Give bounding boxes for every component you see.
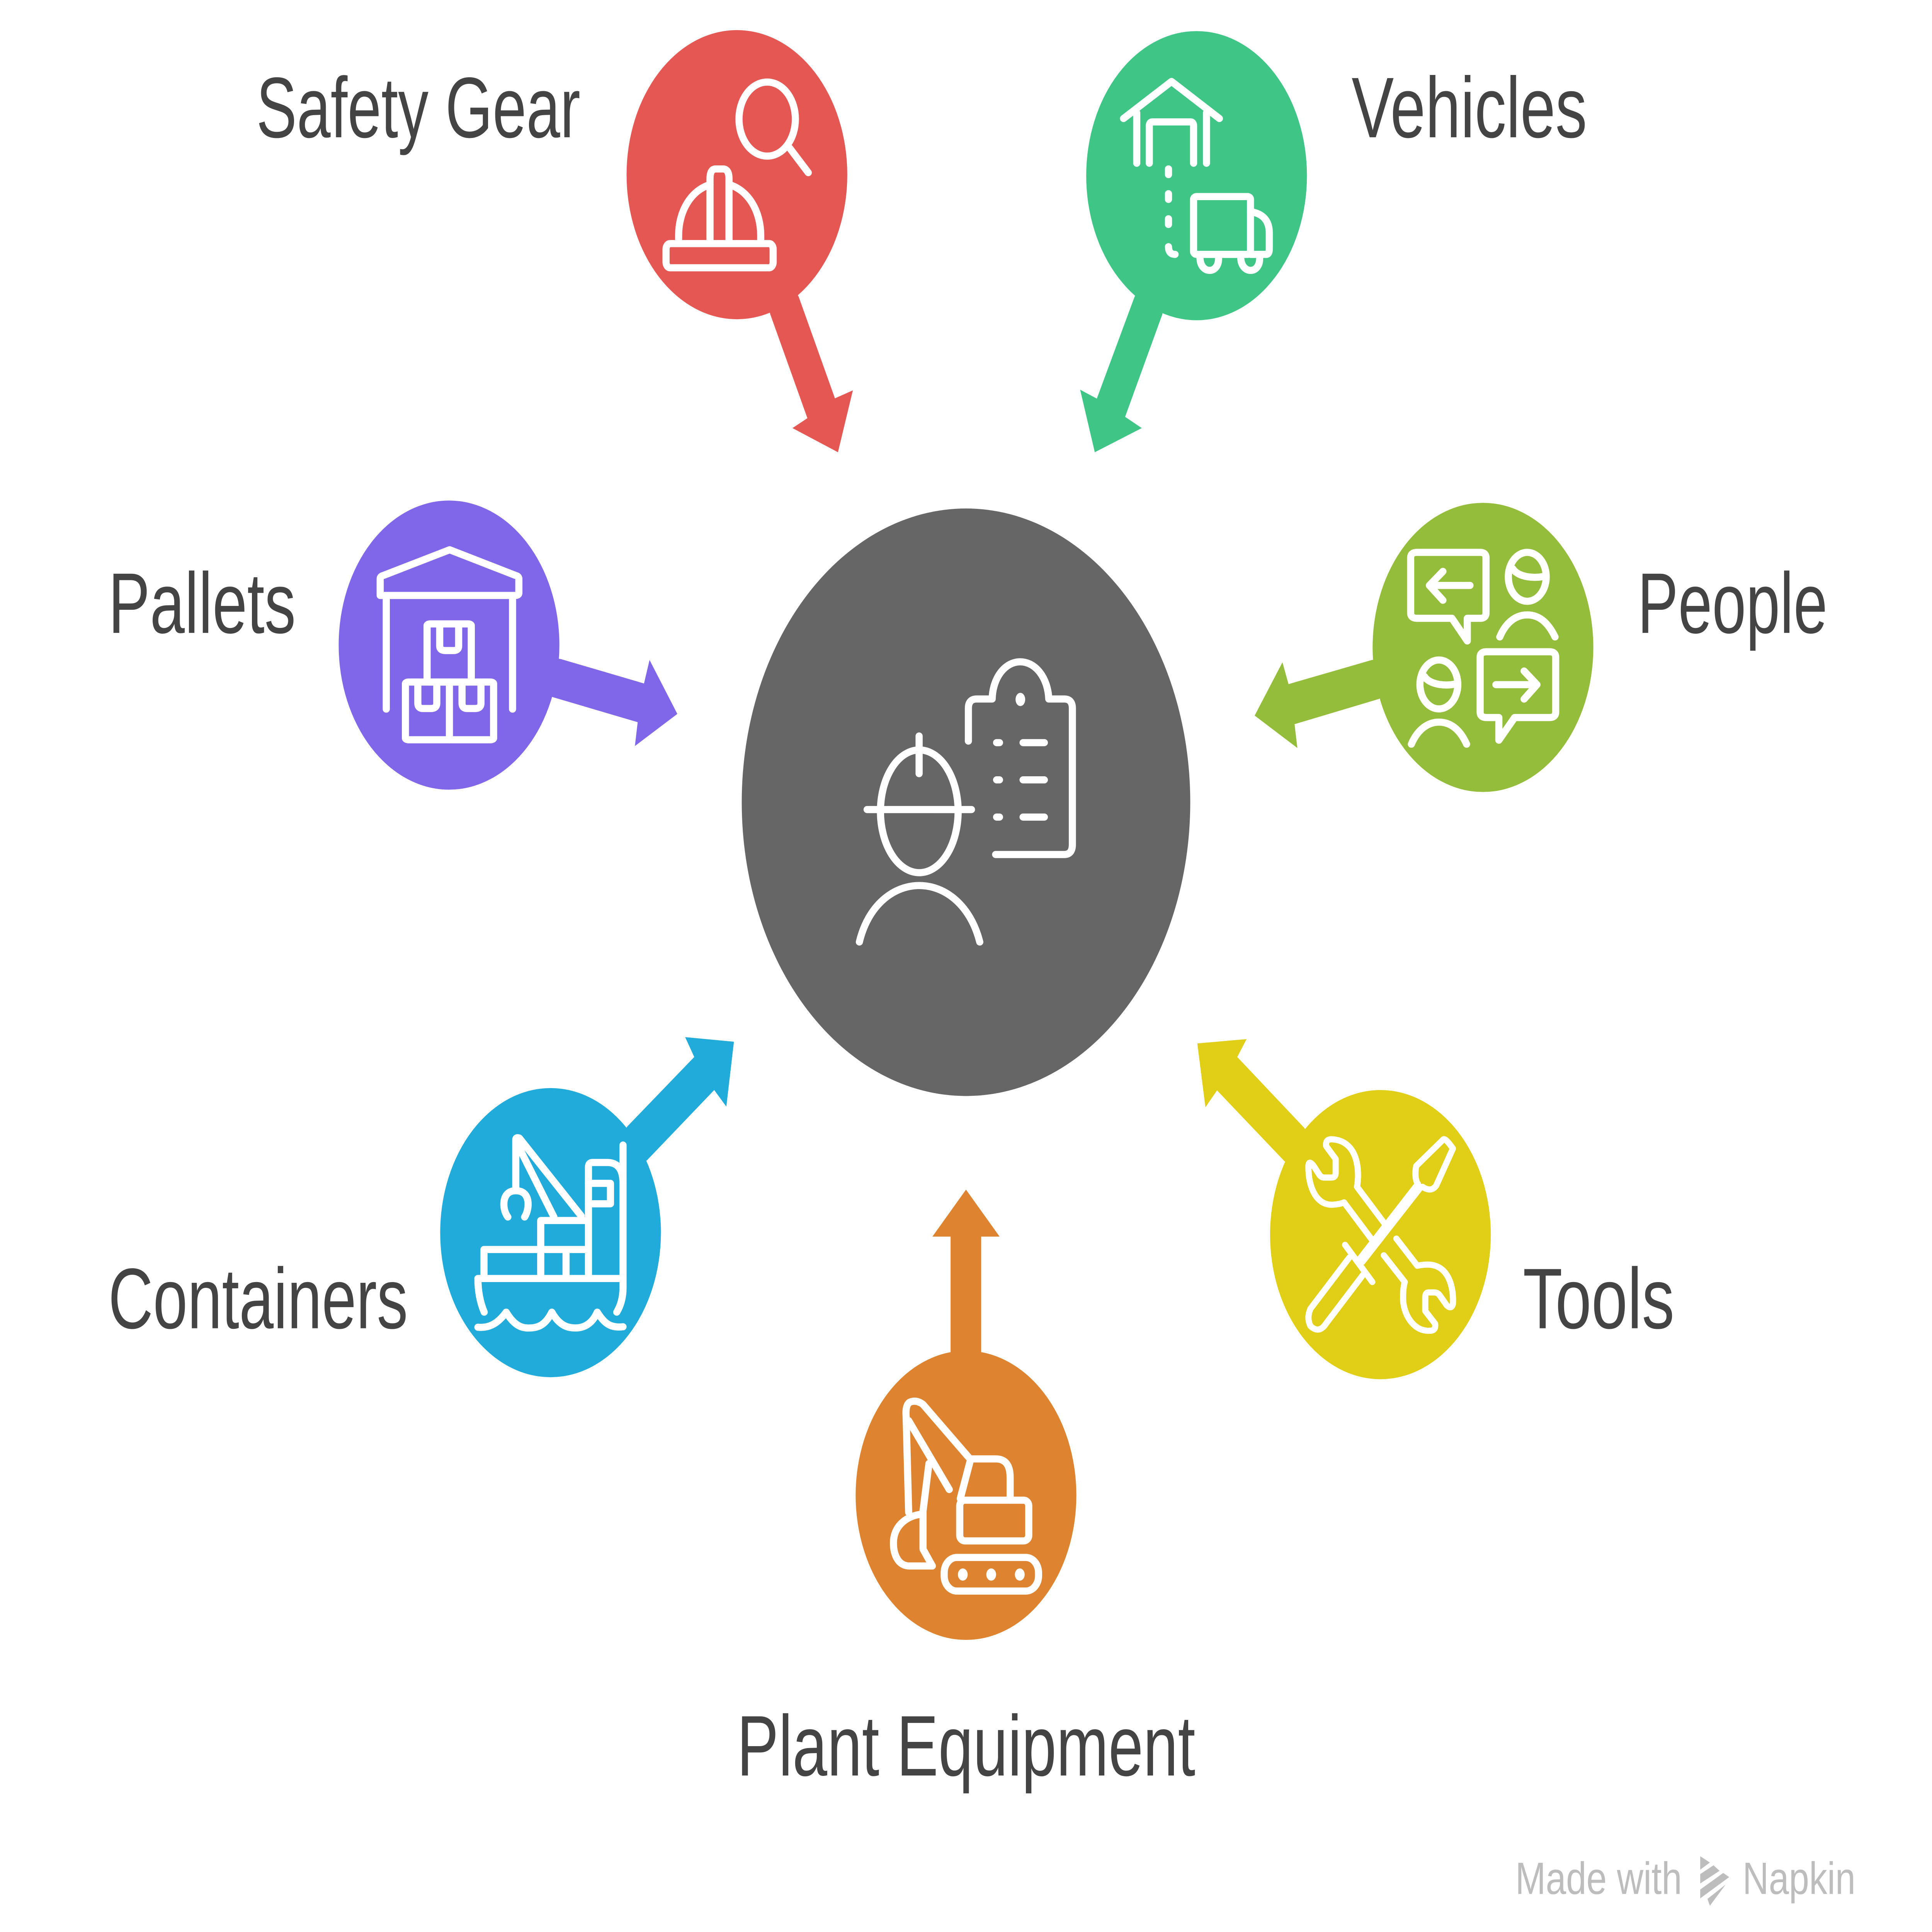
circle: tools xyxy=(1270,1090,1491,1379)
icon: crossed wrench and screwdriver xyxy=(1308,1139,1453,1331)
panel: Pallets xyxy=(108,500,677,790)
circle: vehicles xyxy=(1086,31,1307,320)
arrow: containers to center xyxy=(551,1037,734,1233)
icon: warehouse with boxes xyxy=(380,550,519,740)
icon: warehouse and truck xyxy=(1124,82,1269,270)
icon: excavator xyxy=(893,1401,1039,1591)
arrow: safety gear to center xyxy=(737,175,853,452)
watermark text: Made with: Made with xyxy=(1515,1853,1682,1904)
circle: safety gear xyxy=(627,30,847,319)
arrow: tools to center xyxy=(1197,1039,1381,1235)
label: People: People xyxy=(1638,556,1827,652)
watermark: Made with Napkin xyxy=(1515,1853,1855,1906)
icon: container ship with crane xyxy=(478,1138,623,1328)
panel: Plant Equipment xyxy=(737,1190,1196,1794)
panel: Tools xyxy=(1197,1039,1674,1379)
circle: plant equipment xyxy=(855,1351,1077,1640)
icon: worker with clipboard xyxy=(859,662,1072,942)
circle: containers xyxy=(440,1088,661,1377)
circle: people xyxy=(1372,503,1594,792)
label: Pallets: Pallets xyxy=(108,556,296,651)
label: Plant Equipment: Plant Equipment xyxy=(737,1698,1196,1794)
panel: Vehicles xyxy=(1080,31,1587,452)
panel: Safety Gear xyxy=(256,30,853,452)
label: Tools: Tools xyxy=(1523,1251,1674,1347)
panel: People xyxy=(1255,503,1827,792)
label: Safety Gear: Safety Gear xyxy=(256,60,580,156)
arrow: pallets to center xyxy=(449,645,677,746)
arrow: people to center xyxy=(1255,648,1483,748)
panel: Containers xyxy=(108,1037,734,1377)
arrow: vehicles to center xyxy=(1080,176,1197,452)
panel: center worker xyxy=(742,509,1190,1096)
circle: pallets xyxy=(338,500,560,790)
label: Vehicles: Vehicles xyxy=(1352,60,1587,156)
icon: hard hat and magnifier xyxy=(666,82,808,268)
label: Containers: Containers xyxy=(108,1251,408,1347)
arrow: plant equipment to center xyxy=(932,1190,1000,1389)
icon: two people talking xyxy=(1411,552,1556,744)
watermark text: Napkin: Napkin xyxy=(1743,1853,1855,1904)
icon: Napkin logo xyxy=(1700,1856,1729,1906)
central circle xyxy=(742,509,1190,1096)
